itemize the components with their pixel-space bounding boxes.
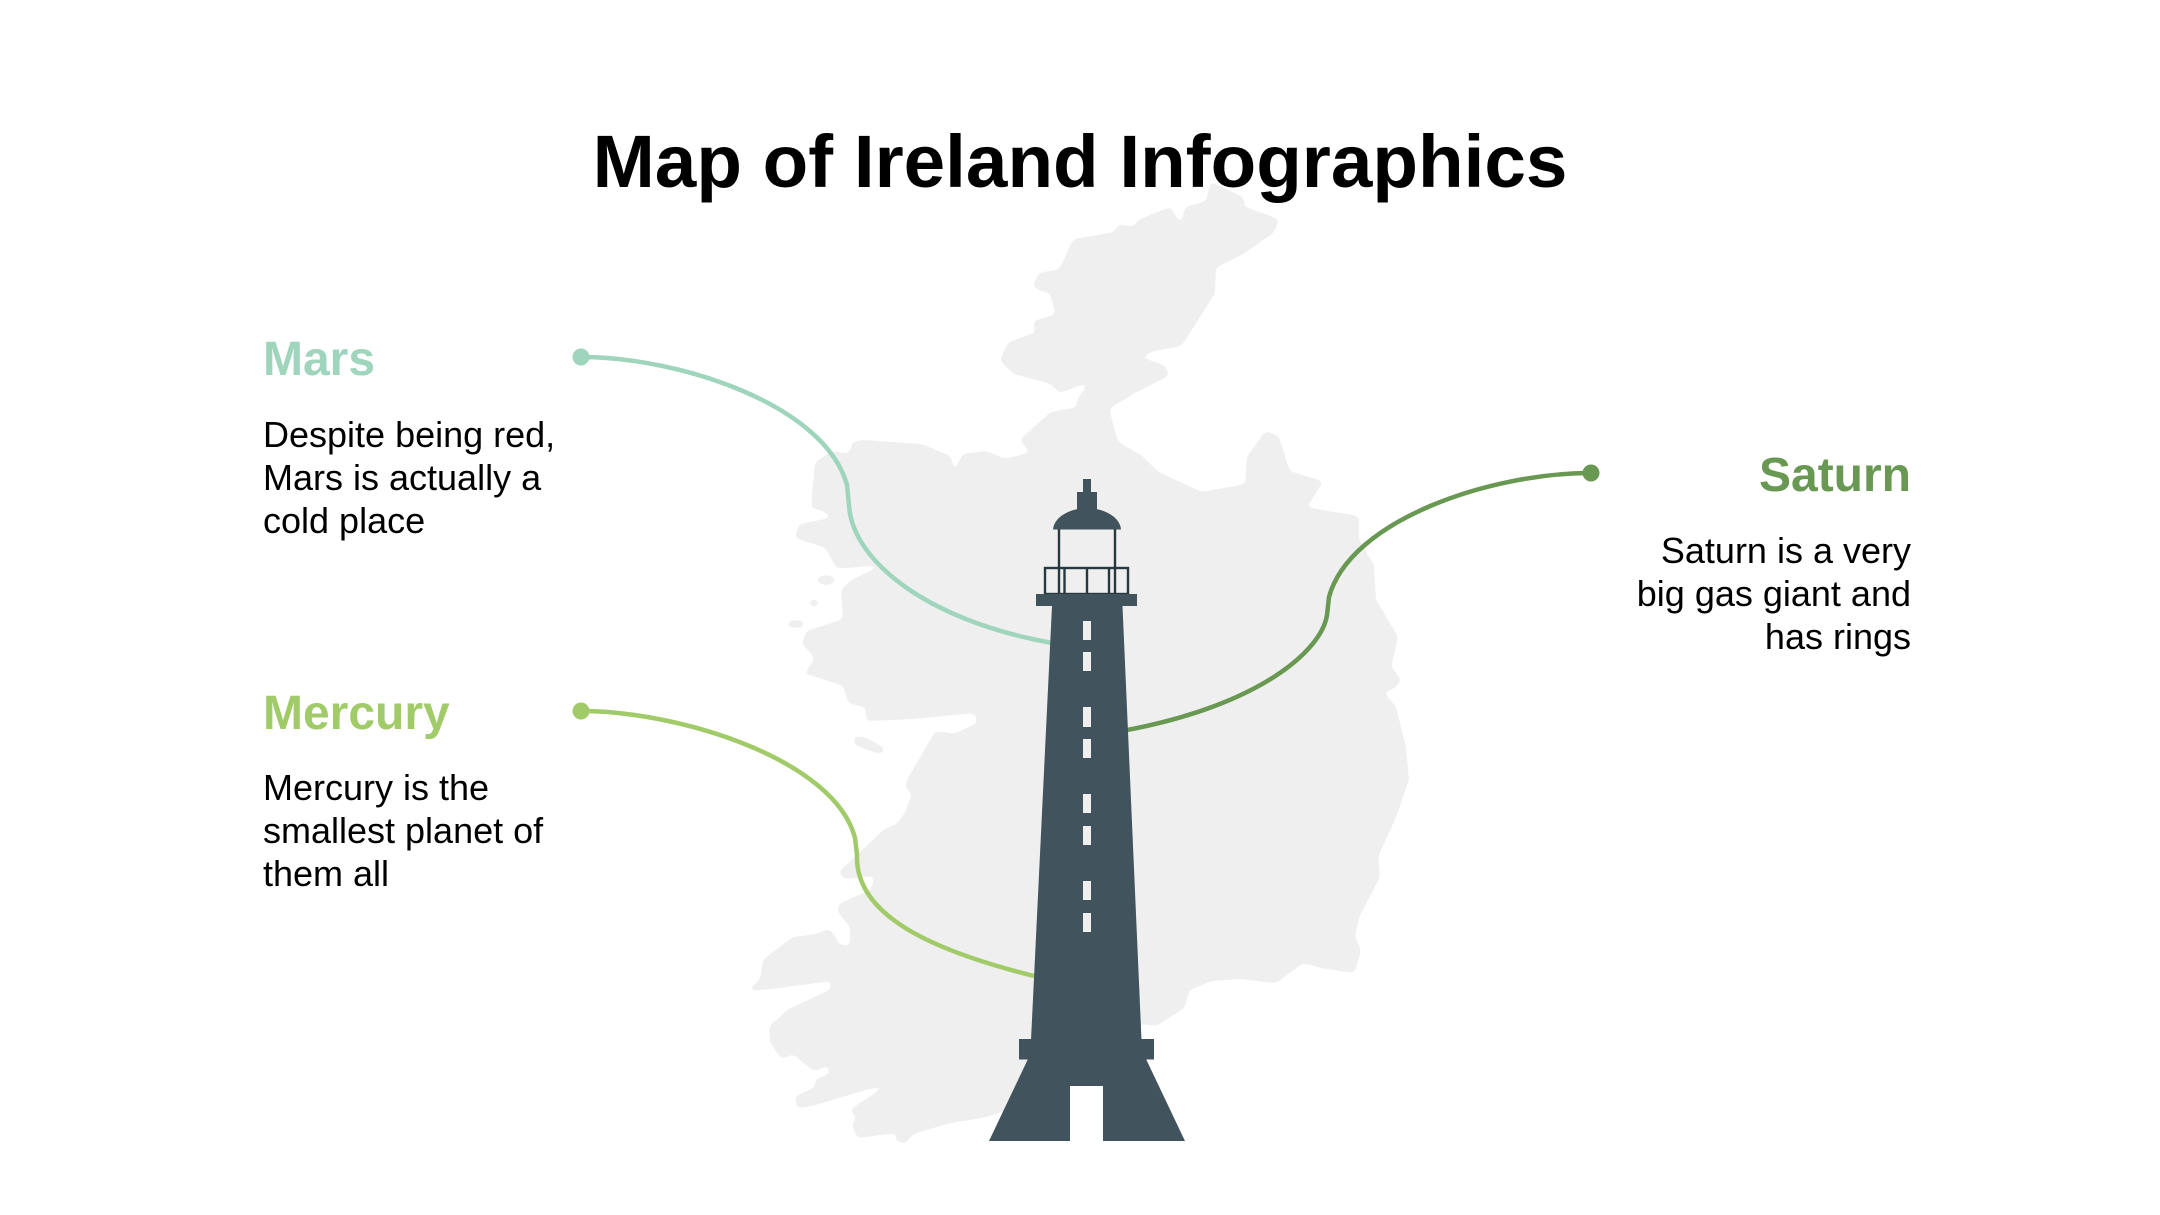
heading: Mars: Mars	[263, 333, 375, 386]
text: Mercury description: smallest planet of	[263, 810, 543, 851]
map of Ireland silhouette	[750, 183, 1408, 1143]
title: Map of Ireland Infographics	[593, 119, 1567, 203]
connector: Mars	[572, 348, 1052, 643]
text: Mercury description: Mercury is the	[263, 767, 489, 808]
text: Saturn description: has rings	[1765, 616, 1911, 657]
text: Saturn description	[1637, 530, 1911, 657]
heading: Mercury: Mercury	[263, 687, 450, 740]
connector: Mercury	[572, 702, 1034, 976]
text: Mars description: Mars is actually a	[263, 457, 541, 498]
text: Mercury description	[263, 767, 544, 894]
text: Saturn description: Saturn is a very	[1661, 530, 1911, 571]
text: Mars description: Despite being red,	[263, 414, 555, 455]
connector: Saturn	[1127, 464, 1600, 730]
text: Mars description	[263, 414, 555, 541]
text: Mercury description: them all	[263, 853, 389, 894]
heading: Saturn: Saturn	[1759, 449, 1911, 502]
text: Saturn description: big gas giant and	[1637, 573, 1911, 614]
text: Mars description: cold place	[263, 500, 425, 541]
icon: lighthouse	[989, 479, 1185, 1141]
